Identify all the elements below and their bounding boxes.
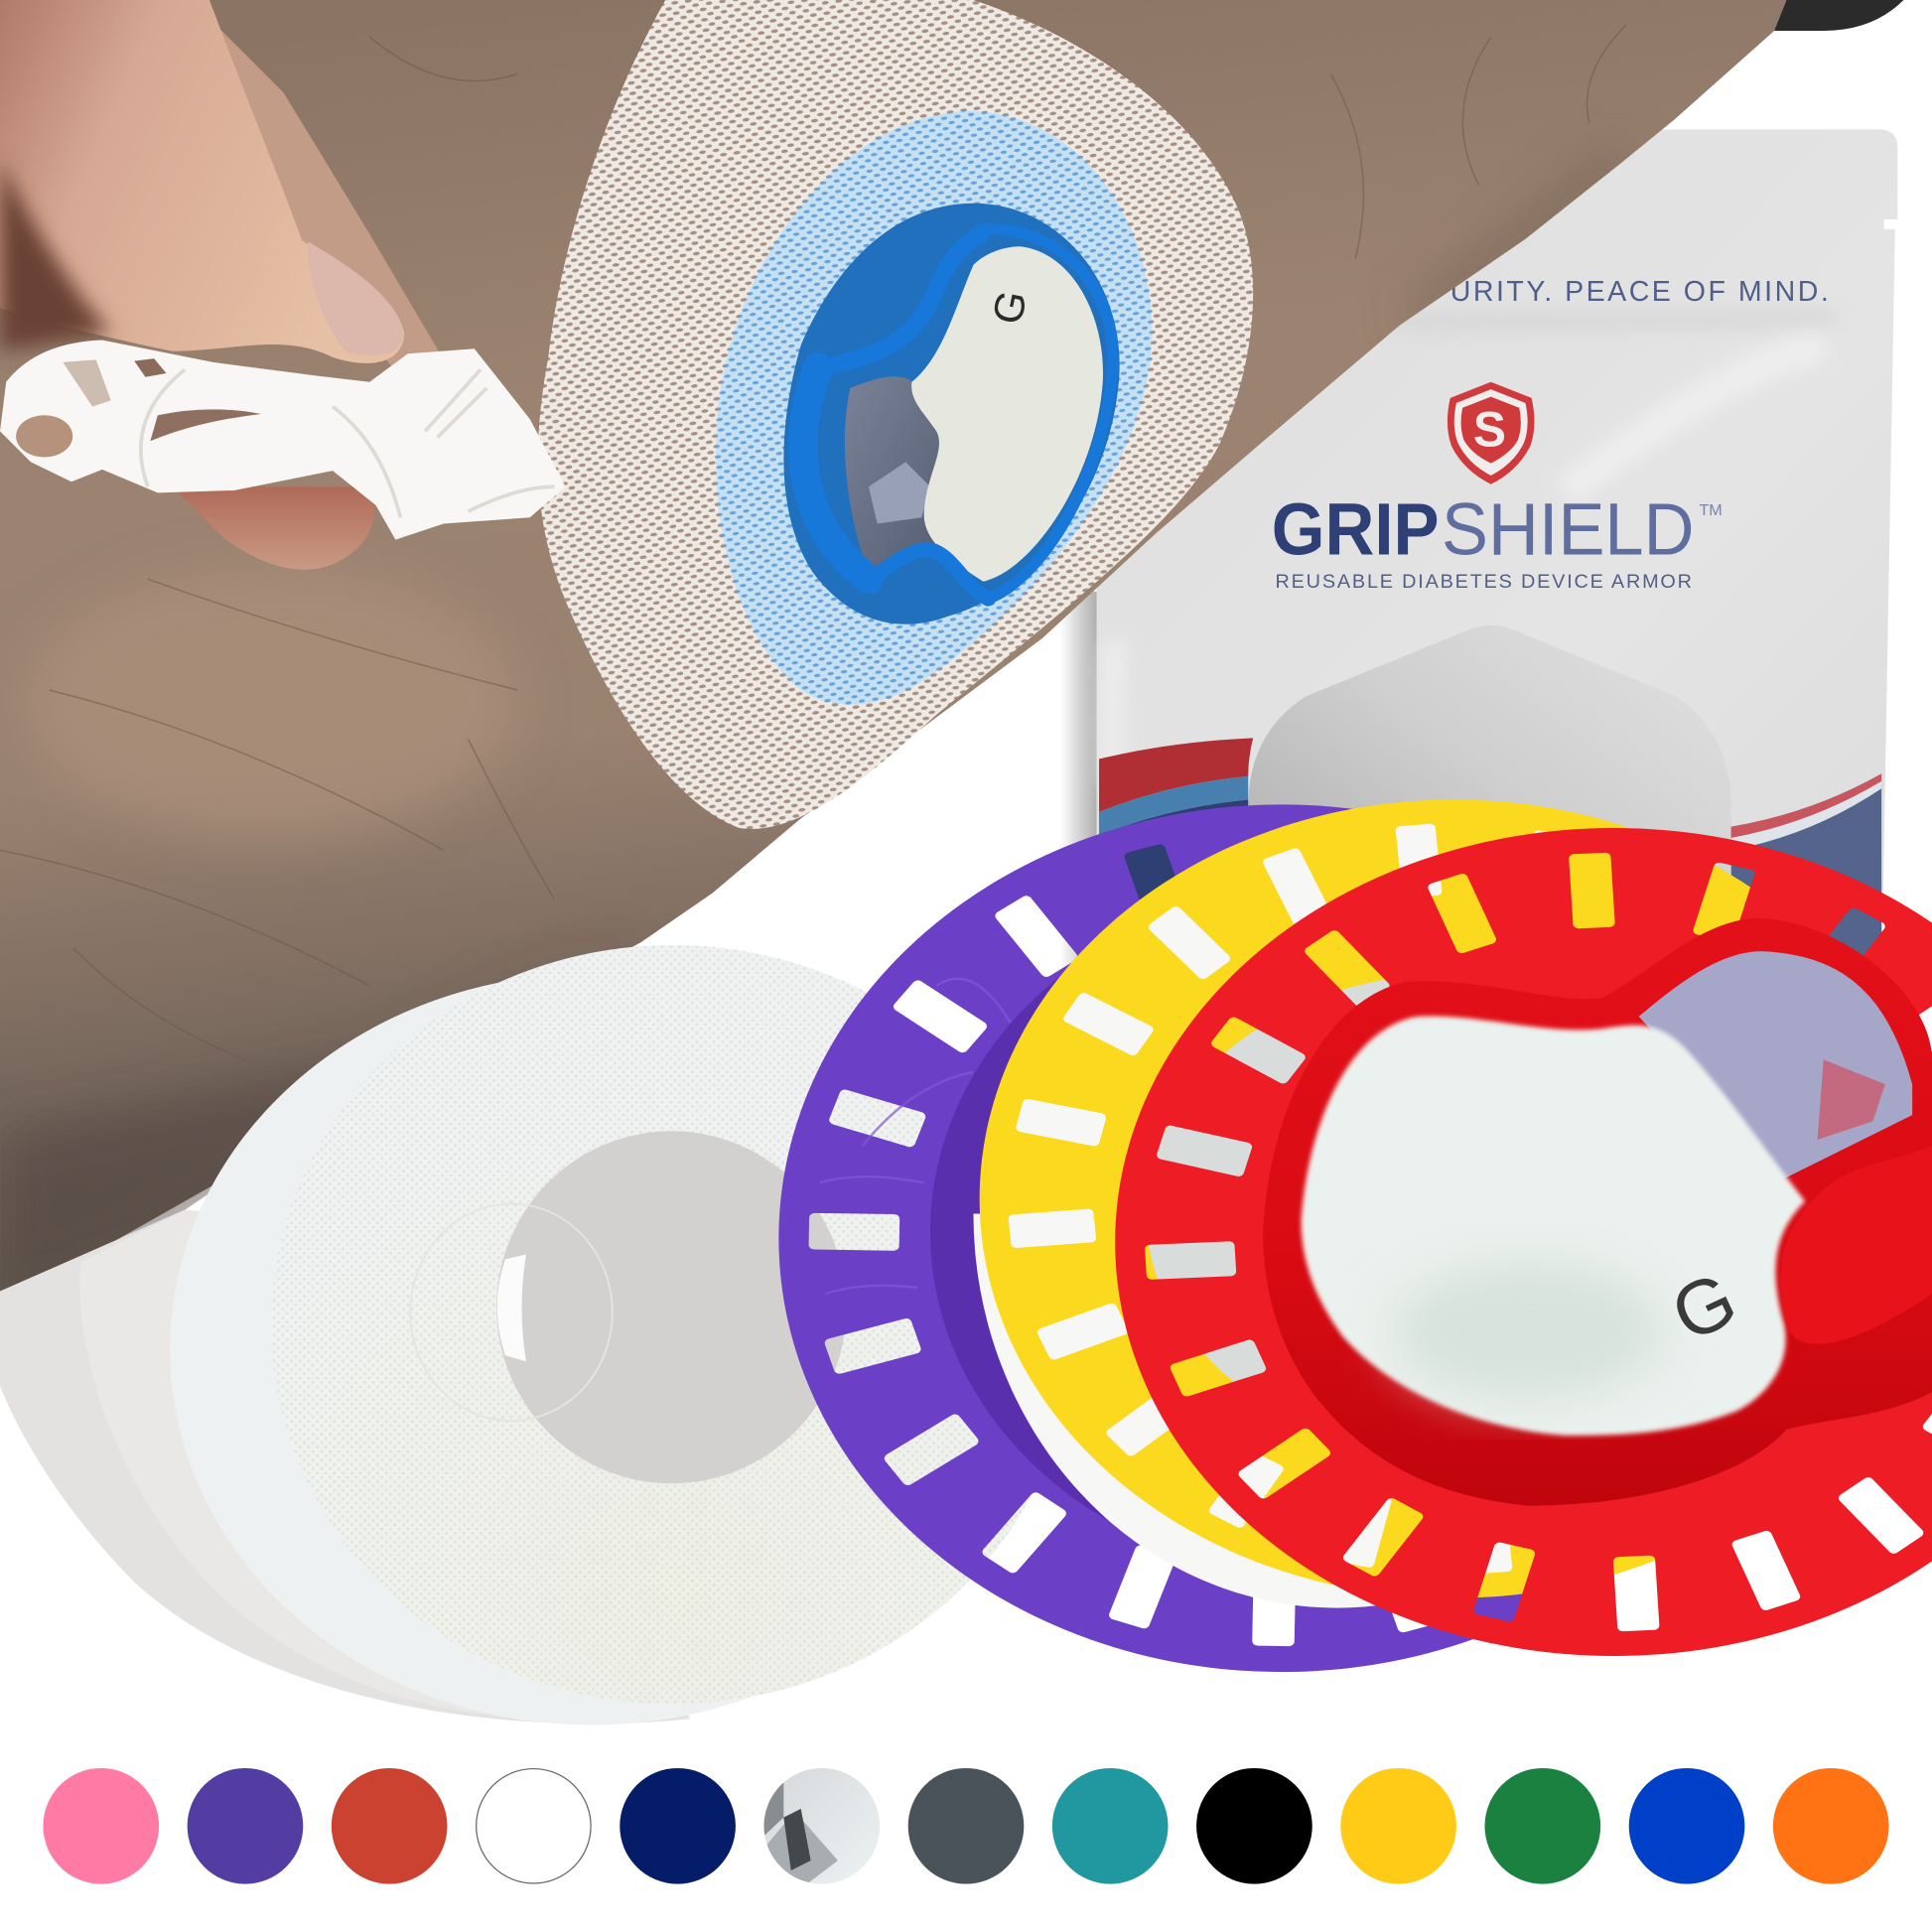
swatch: navy [620, 1768, 736, 1884]
armor ridge [803, 229, 1113, 599]
thumb [0, 0, 404, 363]
pouch colour band left [1099, 738, 1253, 986]
sensor window [845, 376, 951, 573]
swatch: clear [763, 1768, 880, 1884]
brand name: SHIELD [1442, 487, 1694, 570]
patch centre hole [410, 1131, 847, 1483]
brand name: TM [1699, 501, 1723, 519]
third patch [79, 1210, 640, 1723]
white interior behind yellow [982, 802, 1926, 1595]
glass reflection [869, 462, 930, 523]
skin [0, 0, 1799, 1307]
sensor clear window [1639, 951, 1912, 1180]
ring collar [930, 888, 1719, 1578]
thumb nail [308, 241, 403, 355]
arm shading [0, 160, 1626, 1307]
tagline text: URITY. PEACE OF MIND. [1450, 276, 1829, 308]
lower finger [173, 486, 374, 570]
sensor letter: G [983, 287, 1035, 329]
swatch: yellow [1340, 1768, 1456, 1884]
swatch: pink [43, 1768, 159, 1884]
swatch: blue [1629, 1768, 1744, 1884]
panel: yellow armor ring [979, 800, 1750, 1598]
panel: hand holding clip [0, 0, 566, 570]
swatch: teal [1052, 1768, 1169, 1884]
pouch colour band right [1731, 773, 1881, 986]
sensor letter: G [1659, 1256, 1749, 1358]
panel: blue device armor on sensor [783, 204, 1120, 624]
swatch: green [1484, 1768, 1600, 1884]
pouch fold highlights [1112, 318, 1836, 788]
panel: red armor ring with sensor [1115, 828, 1932, 1656]
icon: shield logo [1448, 382, 1534, 484]
window red reflection [1818, 1059, 1885, 1140]
white interior lower bulge [973, 1213, 1701, 1608]
raised collar [1263, 918, 1932, 1506]
ring inner opening [1146, 973, 1762, 1453]
panel: adhesive patches stack [0, 945, 1074, 1725]
brand name: GRIP [1272, 487, 1440, 570]
icon: dark wristband [1774, 0, 1903, 31]
sensor shading [1392, 1263, 1663, 1399]
ring [778, 804, 1523, 1672]
second finger [215, 25, 439, 369]
skin creases and hairs [0, 25, 1626, 1059]
white sensor [911, 246, 1103, 582]
ring [979, 800, 1750, 1598]
collar right notch [1781, 1146, 1932, 1344]
clip openings [16, 415, 72, 457]
icon: shield logo: S [1473, 401, 1506, 457]
white sensor [1302, 1016, 1805, 1436]
swatch: orange [1773, 1768, 1889, 1884]
panel: mesh adhesive patch [538, 0, 1253, 829]
swatch: red [332, 1768, 448, 1884]
thumb shadow area [0, 160, 111, 351]
swatch: white [477, 1769, 591, 1883]
brand name [1272, 487, 1723, 570]
pouch side shadow [1059, 592, 1099, 986]
pouch window [1248, 625, 1731, 986]
ring [1115, 828, 1932, 1656]
panel: purple armor ring [778, 804, 1547, 1672]
mesh patch [538, 0, 1253, 829]
colour swatches [43, 1768, 1889, 1884]
pouch body [1097, 129, 1897, 986]
clip body [0, 341, 566, 540]
clip shading [141, 369, 554, 517]
arm photo [0, 0, 1799, 1307]
back patch [0, 1210, 690, 1724]
patch weave texture [271, 945, 1074, 1704]
ring texture [819, 979, 1011, 1294]
armor base [783, 204, 1120, 624]
swatch: purple [188, 1768, 303, 1884]
second patch [170, 973, 1013, 1725]
white reusable clip [0, 341, 566, 540]
swatch: black [1196, 1768, 1312, 1884]
swatch: grey [908, 1768, 1024, 1884]
product descriptor: REUSABLE DIABETES DEVICE ARMOR [1276, 571, 1692, 593]
blue ring on patch [716, 111, 1152, 705]
front patch [271, 945, 1074, 1704]
panel: product pouch [1059, 129, 1897, 986]
